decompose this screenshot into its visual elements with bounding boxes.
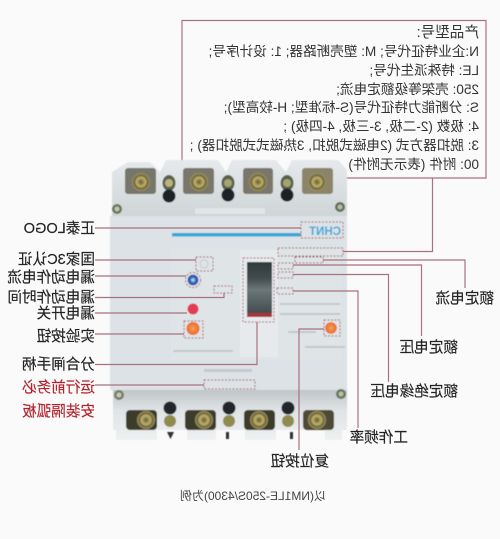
left labels: 实验按钮 [37, 328, 95, 345]
caption: 以(NM1LE-250S/4300)为例 [180, 489, 326, 503]
product model description text: S: 分断能力特征代号(S-标准型; H-较高型); [224, 99, 479, 115]
product model description text: LE: 特殊派生代号; [369, 63, 479, 78]
right labels: 额定绝缘电压 [370, 383, 458, 400]
bottom terminal block [113, 389, 347, 440]
right labels: 复位按钮 [271, 452, 329, 470]
blue dial [186, 272, 200, 288]
right labels: 额定电流 [435, 290, 494, 307]
left leader lines [95, 228, 301, 385]
left labels: 漏电动作电流 [7, 269, 95, 286]
left labels: 漏电动作时间 [7, 289, 95, 306]
CHNT logo [301, 222, 343, 238]
right labels: 额定电压 [400, 339, 458, 356]
left labels: 安装隔弧板 [22, 402, 95, 420]
certification mark [196, 257, 213, 271]
circuit breaker device [110, 160, 347, 440]
right labels [271, 290, 494, 470]
product model description text: 250: 壳架等级额定电流; [336, 81, 479, 97]
left labels: 正泰LOGO [24, 220, 95, 237]
left labels: 运行前务必 [22, 379, 95, 396]
red button [188, 304, 198, 314]
product model text box frame [182, 20, 486, 178]
left labels: 漏电开关 [37, 305, 95, 322]
small spec lines [173, 303, 345, 372]
left labels: 分合闸手柄 [22, 356, 95, 373]
action time marker [214, 286, 232, 293]
CHNT logo: CHNT [309, 226, 341, 238]
product model description text: 00: 附件 (表示无附件) [348, 157, 479, 172]
orange test button [184, 321, 203, 338]
blue stripe [172, 233, 301, 236]
right orange reset button [324, 320, 340, 336]
arc shield marker [204, 380, 255, 389]
product model description text: 4: 极数 (2-二极, 3-三极, 4-四极) ; [283, 119, 479, 134]
main body [110, 216, 347, 390]
product model description text: N:企业特征代号; M: 塑壳断路器; 1: 设计序号; [209, 43, 479, 59]
right labels: 工作频率 [350, 429, 408, 446]
left labels [7, 220, 95, 420]
handle panel [240, 250, 278, 357]
product model description text: 3: 脱扣器方式 (2电磁式脱扣, 3热磁式式脱扣器) ; [190, 138, 479, 153]
product model description text [190, 24, 479, 172]
left labels: 国家3C认证 [18, 251, 95, 268]
rating dashed markers [277, 248, 343, 294]
right leader lines [293, 178, 465, 450]
top terminal block [112, 160, 347, 216]
product model description text: 产品型号: [417, 24, 479, 41]
